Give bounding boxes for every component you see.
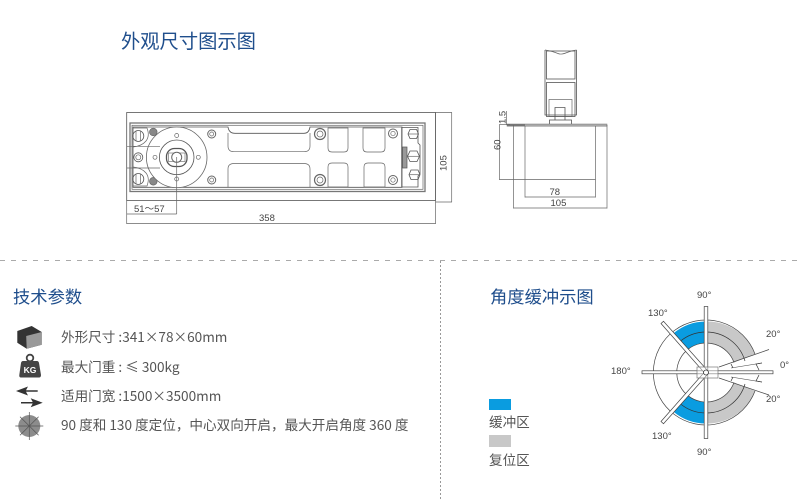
body plate outline [133,127,402,187]
return sectors [706,321,755,362]
windows [328,128,348,152]
angle labels: 20° [766,394,781,405]
angle labels: 180° [611,366,631,377]
spec row: positioning [15,412,409,440]
top view drawing: 105 [438,155,450,171]
top view drawing: 358 [259,213,275,224]
buffer sectors [674,322,706,350]
dimensions [127,145,160,147]
icon: weight KG: KG [24,365,37,375]
side view drawing [492,50,607,209]
spec row: door size: 适用门宽 :1500×3500mm [61,385,221,405]
icon: weight KG [19,355,41,378]
angle labels: 0° [780,360,789,371]
top view drawing [127,112,452,224]
angle labels: 90° [697,290,712,301]
hub [697,367,718,378]
left bolts [133,128,148,147]
dimension labels: 51～57 [134,204,165,215]
angle labels: 130° [648,308,668,319]
legend [489,399,530,469]
heading: 角度缓冲示图: 角度缓冲示图 [490,283,594,308]
spec row: dimensions [17,326,227,349]
angle labels: 130° [652,431,672,442]
right end block [402,128,420,187]
heading: 技术参数: 技术参数 [13,283,82,308]
title: 外观尺寸图示图: 外观尺寸图示图 [121,26,256,54]
central slots [228,133,310,152]
spec row: positioning: 90 度和 130 度定位，中心双向开启，最大开启角度 360 度 [61,414,409,434]
angle labels [611,290,789,458]
angle diagram [611,290,789,458]
hub [146,127,207,188]
legend: buffer zone: 缓冲区 [489,411,530,431]
20 degree lines [719,350,769,395]
side view drawing: 1.5 [498,111,508,124]
angle labels: 20° [766,329,781,340]
angle labels: 90° [697,447,712,458]
spec row: max door weight: 最大门重 : ≤ 300kg [61,356,180,376]
icon: cube [17,326,42,349]
icon: double arrows [16,386,43,407]
door leaves [642,371,773,374]
legend: return zone: 复位区 [489,449,530,469]
side view drawing: 105 [550,198,566,209]
side view labels: 78 [550,187,560,198]
spec row: max door weight [19,355,180,378]
screw holes [150,128,398,186]
side view drawing: 60 [492,139,504,150]
icon: rotary dial [15,412,43,440]
spec row: dimensions: 外形尺寸 :341×78×60mm [61,326,227,346]
